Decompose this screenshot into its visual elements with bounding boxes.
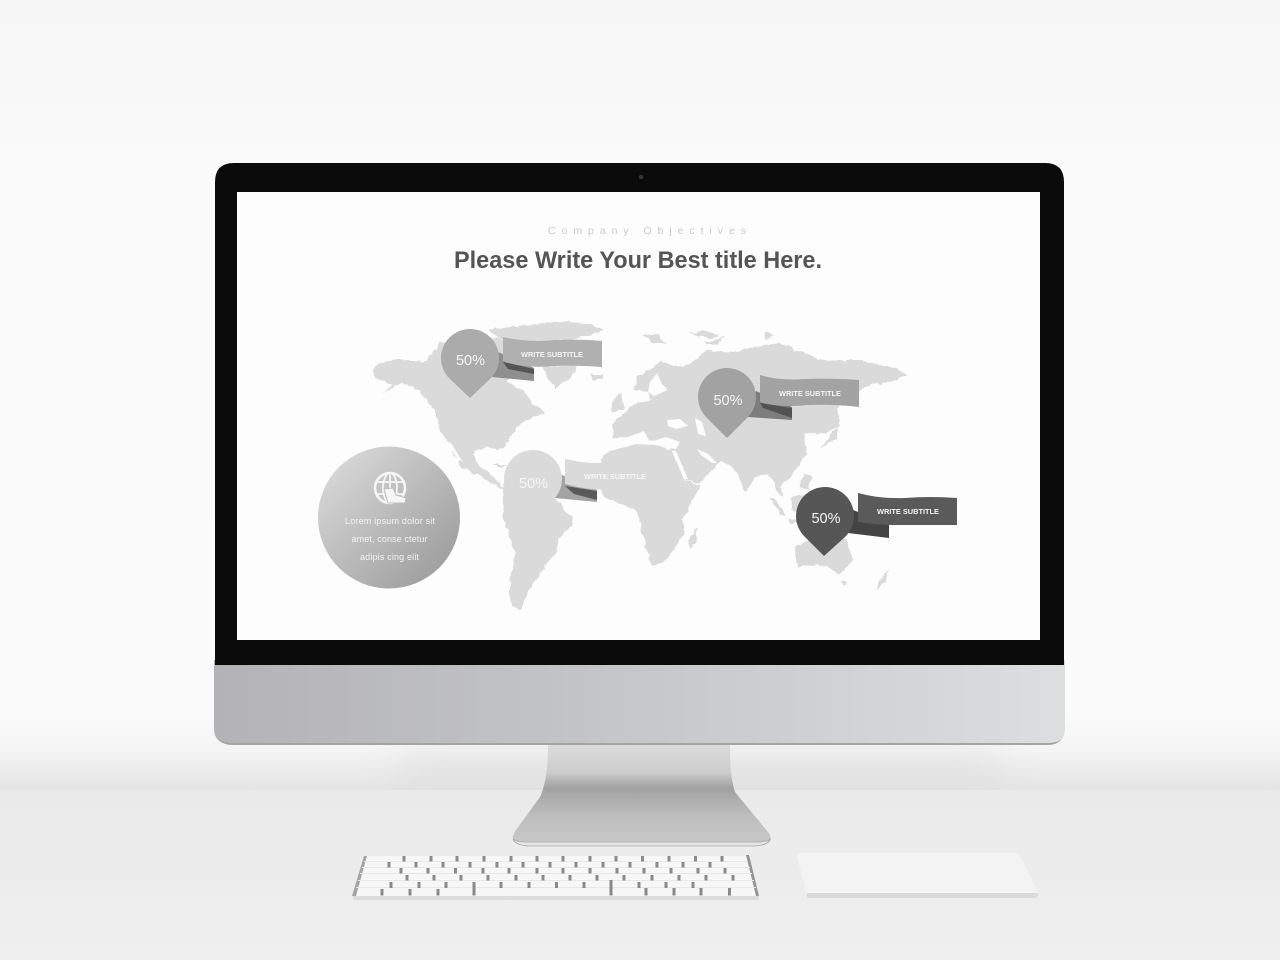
- label: WRITE SUBTITLE: [779, 389, 841, 398]
- monitor stand: [513, 744, 771, 846]
- body text: adipis cing elit: [360, 552, 419, 562]
- monitor: [214, 163, 1065, 745]
- icon: globe: [375, 473, 406, 503]
- madagascar: [688, 528, 698, 549]
- callout: asia: [698, 368, 859, 438]
- iceland: [590, 374, 603, 380]
- body text: [345, 516, 435, 562]
- callout: australia: [796, 487, 957, 556]
- siberian islands: [688, 331, 775, 345]
- percent: 50%: [456, 352, 485, 369]
- monitor shadow on wall: [400, 750, 1000, 790]
- world map: [373, 322, 907, 609]
- desk surface: [0, 790, 1280, 960]
- pin: [796, 487, 854, 556]
- keys row 6: [382, 880, 730, 896]
- keyboard: [352, 855, 759, 900]
- monitor bezel: [215, 163, 1064, 665]
- ribbon fold: [848, 510, 889, 538]
- south america: [503, 462, 573, 609]
- percent: 50%: [812, 510, 840, 527]
- united kingdom: [611, 393, 625, 413]
- monitor chin: [214, 660, 1065, 744]
- cuba: [492, 463, 507, 468]
- ribbon: [760, 375, 859, 407]
- north america: [373, 337, 545, 490]
- australia: [795, 538, 853, 575]
- screen: [237, 192, 1040, 640]
- keys row 4: [407, 875, 733, 880]
- ribbon fold: [555, 475, 597, 502]
- africa: [600, 443, 700, 565]
- trackpad: [797, 853, 1038, 898]
- new zealand: [876, 568, 890, 591]
- pin: [698, 368, 756, 438]
- philippines and borneo: [790, 474, 812, 510]
- ribbon: [503, 337, 602, 367]
- keys row 1: [404, 856, 722, 862]
- indonesia: [769, 497, 816, 527]
- greenland: [543, 366, 578, 388]
- info circle: [318, 446, 460, 588]
- label: WRITE SUBTITLE: [521, 350, 583, 359]
- label: WRITE SUBTITLE: [584, 472, 646, 481]
- ribbon: [858, 493, 957, 525]
- percent: 50%: [519, 475, 548, 492]
- callout: north america: [441, 329, 602, 398]
- callout: south america: [504, 450, 665, 519]
- ribbon fold: [492, 352, 534, 381]
- arctic islands: [487, 322, 604, 342]
- svalbard: [642, 334, 666, 344]
- ribbon: [565, 459, 665, 490]
- title: Please Write Your Best title Here.: [454, 247, 822, 274]
- pin: [504, 450, 562, 519]
- body text: Lorem ipsum dolor sit: [345, 516, 435, 526]
- pin: [441, 329, 499, 398]
- subtitle: Company Objectives: [548, 225, 746, 237]
- label: WRITE SUBTITLE: [877, 507, 939, 516]
- eurasia: [612, 343, 907, 498]
- key row gaps: [356, 862, 756, 888]
- keys row 3: [401, 868, 725, 874]
- keys row 2: [389, 862, 710, 868]
- keys row 5: [391, 882, 693, 888]
- ribbon fold: [748, 391, 792, 420]
- percent: 50%: [714, 392, 742, 409]
- tasmania: [840, 580, 848, 586]
- inland seas: [447, 373, 717, 479]
- body text: amet, conse ctetur: [352, 534, 428, 544]
- japan: [820, 428, 838, 449]
- new guinea: [838, 515, 868, 532]
- camera: [639, 175, 643, 179]
